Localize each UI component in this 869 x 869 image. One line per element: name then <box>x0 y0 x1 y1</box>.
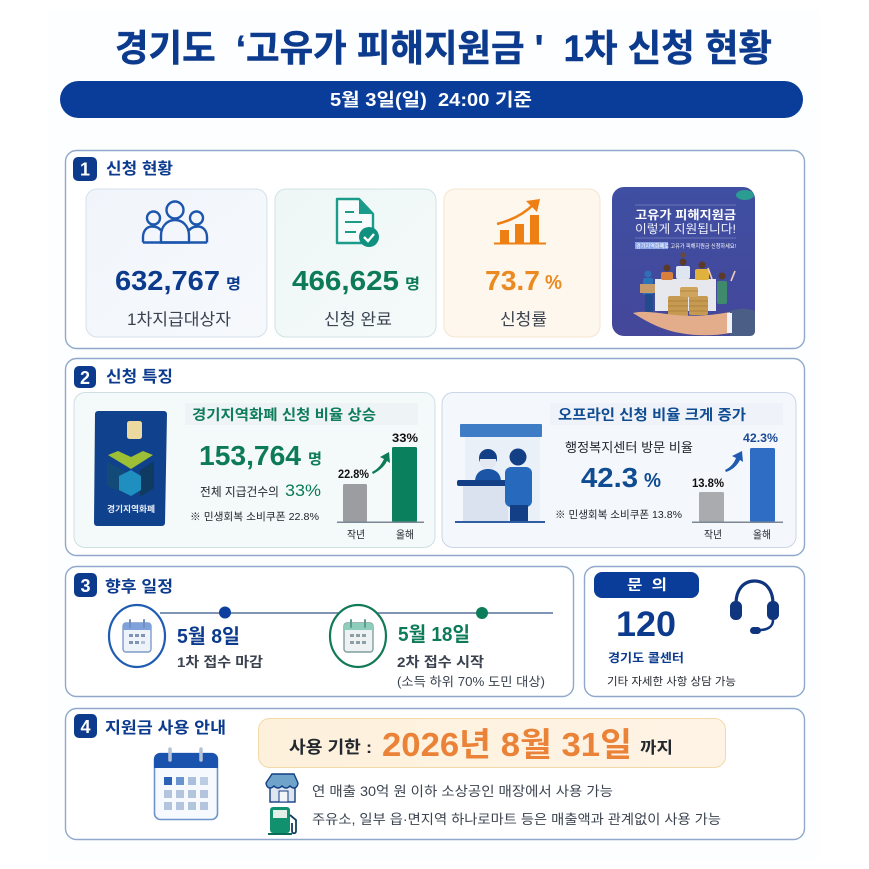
card: eligible recipients <box>86 189 267 337</box>
icon: rising bar chart <box>494 199 546 244</box>
icon: document with check <box>337 199 379 247</box>
bar chart: offline share: 13.8% <box>692 476 724 490</box>
heading: section 1: 1 <box>80 160 90 180</box>
heading: section 4 <box>74 714 226 738</box>
panel: 3 upcoming schedule <box>66 566 574 696</box>
sub-panel: offline applications: 오프라인 신청 비율 크게 증가 <box>558 407 746 424</box>
sub-panel: local currency: 명 <box>308 451 322 468</box>
heading: section 4: 4 <box>80 717 91 737</box>
heading: section 3 <box>74 573 173 597</box>
panel: inquiry <box>584 566 804 696</box>
milestone: second round start: 2차 접수 시작 <box>397 654 484 670</box>
heading: section 2: 신청 특징 <box>106 368 173 386</box>
arrow: increase <box>372 452 390 474</box>
icon: local currency card <box>94 411 167 526</box>
panel: 2 application characteristics <box>66 358 804 556</box>
panel: 4 usage guide: 연 매출 30억 원 이하 소상공인 매장에서 사용 가능 <box>312 784 613 799</box>
sub-panel: local currency: 33% <box>285 481 321 500</box>
date banner: 5월 3일(일) 24:00 기준 <box>330 90 532 110</box>
callout: usage deadline: 사용 기한 : <box>289 738 372 757</box>
card: completed applications: 466,625 <box>292 265 399 296</box>
bar chart: offline share: 42.3% <box>743 431 778 445</box>
poster image: fuel subsidy <box>612 187 755 336</box>
heading: section 1 <box>73 157 173 181</box>
panel: inquiry: 120 <box>616 605 676 644</box>
milestone: first round deadline: 1차 접수 마감 <box>177 654 263 670</box>
sub-panel: local currency: ※ 민생회복 소비쿠폰 22.8% <box>190 511 319 523</box>
milestone: second round start: (소득 하위 70% 도민 대상) <box>397 675 545 689</box>
heading: section 4: 지원금 사용 안내 <box>105 719 226 737</box>
sub-panel: offline applications <box>442 392 796 548</box>
panel: inquiry: 경기도 콜센터 <box>608 650 684 665</box>
heading: section 2 <box>74 366 173 388</box>
card: eligible recipients: 1차지급대상자 <box>127 310 231 329</box>
icon: service counter <box>455 424 545 523</box>
sub-panel: local currency: 153,764 <box>199 440 301 471</box>
milestone: first round deadline <box>109 605 263 670</box>
card: eligible recipients: 명 <box>226 276 241 293</box>
card: eligible recipients: 632,767 <box>115 265 220 296</box>
sub-panel: offline applications: % <box>644 470 661 492</box>
bar chart: local currency share: 올해 <box>396 528 414 541</box>
panel: 1 application status <box>66 150 804 348</box>
poster image: fuel subsidy: 고유가 피해지원금 <box>635 207 736 222</box>
panel: 4 usage guide: 주유소, 일부 읍·면지역 하나로마트 등은 매출액과 관계없이 사용 가능 <box>312 812 721 827</box>
illustration: people, coins, hand <box>633 252 755 336</box>
date banner <box>60 81 803 118</box>
sub-panel: local currency: 경기지역화폐 신청 비율 상승 <box>192 407 376 424</box>
heading: section 1: 신청 현황 <box>106 160 173 178</box>
sub-panel: local currency <box>74 392 435 548</box>
card: completed applications <box>275 189 436 337</box>
milestone: second round start: 5월 18일 <box>398 623 470 646</box>
icon: store <box>266 774 298 802</box>
poster image: fuel subsidy: 경기지역화폐로 고유가 피해지원금 신청하세요! <box>636 242 736 250</box>
milestone: second round start <box>330 605 545 689</box>
icon: large calendar <box>154 749 218 820</box>
icon: local currency card: 경기지역화폐 <box>107 504 155 514</box>
icon: calendar blue <box>123 620 151 652</box>
sub-panel: offline applications: ※ 민생회복 소비쿠폰 13.8% <box>555 509 682 521</box>
icon: headset <box>730 581 779 634</box>
bar chart: local currency share: 33% <box>392 431 418 445</box>
icon: calendar green <box>344 620 373 652</box>
bar chart: local currency share <box>337 431 424 541</box>
sub-panel: offline applications: 행정복지센터 방문 비율 <box>565 440 693 455</box>
arrow: increase <box>725 451 743 472</box>
inquiry label <box>594 572 699 598</box>
heading: section 3: 향후 일정 <box>105 578 173 596</box>
heading: section 2: 2 <box>80 368 90 388</box>
bar chart: local currency share: 작년 <box>347 529 365 541</box>
bar chart: offline share <box>692 431 783 541</box>
callout: usage deadline: 까지 <box>640 739 673 757</box>
milestone: first round deadline: 5월 8일 <box>177 625 240 648</box>
timeline <box>160 606 553 619</box>
panel: inquiry: 기타 자세한 사항 상담 가능 <box>607 675 736 688</box>
card: application rate <box>444 189 600 337</box>
callout: usage deadline: 2026년 8월 31일 <box>382 726 632 763</box>
bar chart: offline share: 올해 <box>753 528 771 541</box>
sub-panel: local currency: 전체 지급건수의 <box>200 485 279 499</box>
bar chart: local currency share: 22.8% <box>338 467 369 481</box>
card: completed applications: 신청 완료 <box>324 310 392 329</box>
icon: people <box>143 202 207 242</box>
poster image: fuel subsidy: 이렇게 지원됩니다! <box>635 221 736 236</box>
inquiry label: 문 의 <box>627 577 667 594</box>
title: 경기도 ‘고유가 피해지원금 ' 1차 신청 현황 <box>115 28 772 69</box>
card: application rate: 신청률 <box>500 310 547 329</box>
icon: fuel pump <box>268 807 296 835</box>
sub-panel: offline applications: 42.3 <box>581 462 638 493</box>
bar chart: offline share: 작년 <box>704 529 722 541</box>
heading: section 3: 3 <box>80 576 91 596</box>
card: application rate: % <box>545 272 562 294</box>
callout: usage deadline <box>258 718 726 768</box>
card: completed applications: 명 <box>405 276 420 293</box>
card: application rate: 73.7 <box>485 265 540 296</box>
panel: 4 usage guide <box>66 708 804 840</box>
